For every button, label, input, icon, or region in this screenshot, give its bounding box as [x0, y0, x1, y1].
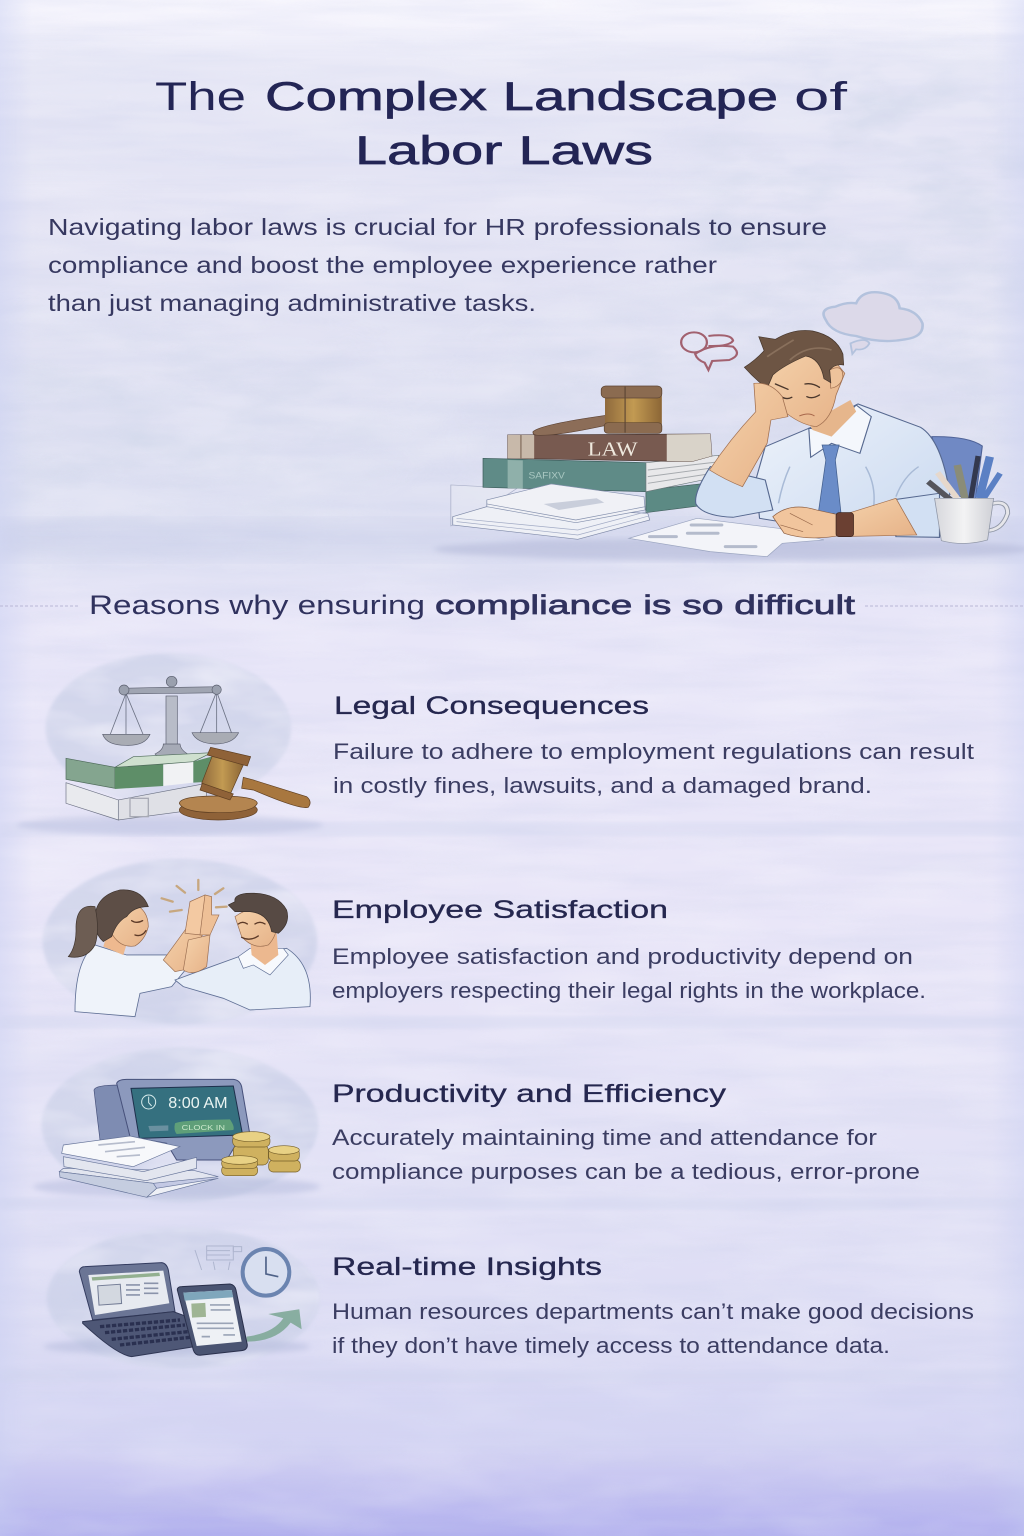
icon: red speech bubbles	[681, 332, 737, 370]
icon: lower green book	[646, 483, 707, 513]
text: legal consequences: Failure to adhere to employment regulations can result	[333, 739, 974, 764]
icon: scales	[103, 676, 239, 759]
icon: time clock device	[94, 1079, 250, 1160]
intro paragraph	[48, 214, 827, 316]
icon: pen cup	[928, 456, 1008, 543]
text: employee satisfaction: Employee satisfaction and productivity depend on	[332, 944, 913, 969]
text: legal consequences	[333, 739, 974, 798]
icon: man head	[744, 330, 856, 437]
icon: paper on desk	[629, 518, 824, 557]
icon: woman	[68, 890, 208, 1017]
icon: man torso and shirt	[756, 404, 950, 537]
icon: resting arm, fist and watch	[773, 493, 939, 538]
intro paragraph: compliance and boost the employee experience rather	[48, 252, 717, 278]
icon: clock	[243, 1249, 289, 1296]
icon: time clock device: CLOCK IN	[182, 1125, 225, 1132]
icon: translucent loose papers	[451, 485, 517, 526]
text: productivity and efficiency: Accurately maintaining time and attendance for	[332, 1125, 877, 1150]
icon: blue chair	[932, 437, 982, 500]
section divider heading: compliance is so difficult	[435, 590, 856, 620]
icon: papers	[59, 1136, 218, 1197]
heading: employee satisfaction: Employee Satisfaction	[332, 896, 668, 924]
title: of	[794, 75, 848, 119]
icon: growth arrow	[247, 1309, 302, 1342]
icon: LAW book: LAW	[588, 438, 638, 460]
icon: scales, books and gavel	[17, 653, 323, 835]
panel: employee satisfaction	[43, 859, 926, 1024]
section divider heading	[0, 590, 1024, 620]
text: real-time insights	[332, 1299, 974, 1358]
panel: productivity and efficiency	[33, 1048, 920, 1202]
text: employee satisfaction: employers respecting their legal rights in the workplace.	[332, 978, 926, 1003]
icon: green and white books	[66, 753, 212, 820]
icon: green book: SAFIXV	[528, 471, 565, 481]
text: legal consequences: in costly fines, lawsuits, and a damaged brand.	[333, 773, 872, 798]
icon: LAW book	[508, 434, 712, 462]
icon: faint charts	[195, 1246, 242, 1270]
icon: time clock, papers and coins	[33, 1048, 320, 1202]
intro paragraph: than just managing administrative tasks.	[48, 290, 536, 316]
title: Labor Laws	[355, 129, 653, 173]
icon: colleagues high-fiving	[43, 859, 317, 1024]
section divider heading: Reasons why ensuring	[89, 590, 425, 620]
heading: legal consequences: Legal Consequences	[334, 692, 649, 720]
panel: legal consequences	[17, 653, 974, 835]
icon: time clock device: 8:00 AM	[168, 1095, 228, 1112]
text: real-time insights: if they don’t have timely access to attendance data.	[332, 1333, 890, 1358]
illustration: stressed HR professional at desk with law books	[434, 292, 1024, 561]
icon: coins	[222, 1132, 300, 1176]
title: The	[155, 75, 246, 119]
icon: tablet	[177, 1284, 247, 1355]
icon: laptop, tablet, clock and arrow	[43, 1228, 320, 1369]
panel: real-time insights	[43, 1228, 974, 1369]
icon: stack of papers	[453, 484, 650, 539]
heading: productivity and efficiency: Productivity and Efficiency	[332, 1080, 727, 1108]
heading: real-time insights: Real-time Insights	[332, 1253, 602, 1281]
icon: man	[175, 893, 310, 1010]
title	[155, 75, 848, 173]
icon: gavel	[179, 747, 310, 820]
icon: laptop	[79, 1263, 195, 1357]
icon: propping arm	[696, 383, 788, 517]
title: Complex Landscape	[265, 75, 778, 119]
text: productivity and efficiency: compliance purposes can be a tedious, error-prone	[332, 1159, 920, 1184]
icon: thought cloud	[824, 292, 923, 354]
icon: green book	[483, 455, 719, 492]
text: real-time insights: Human resources departments can’t make good decisions	[332, 1299, 974, 1324]
text: employee satisfaction	[332, 944, 926, 1003]
icon: gavel	[533, 386, 662, 435]
intro paragraph: Navigating labor laws is crucial for HR professionals to ensure	[48, 214, 827, 240]
text: productivity and efficiency	[332, 1125, 920, 1184]
